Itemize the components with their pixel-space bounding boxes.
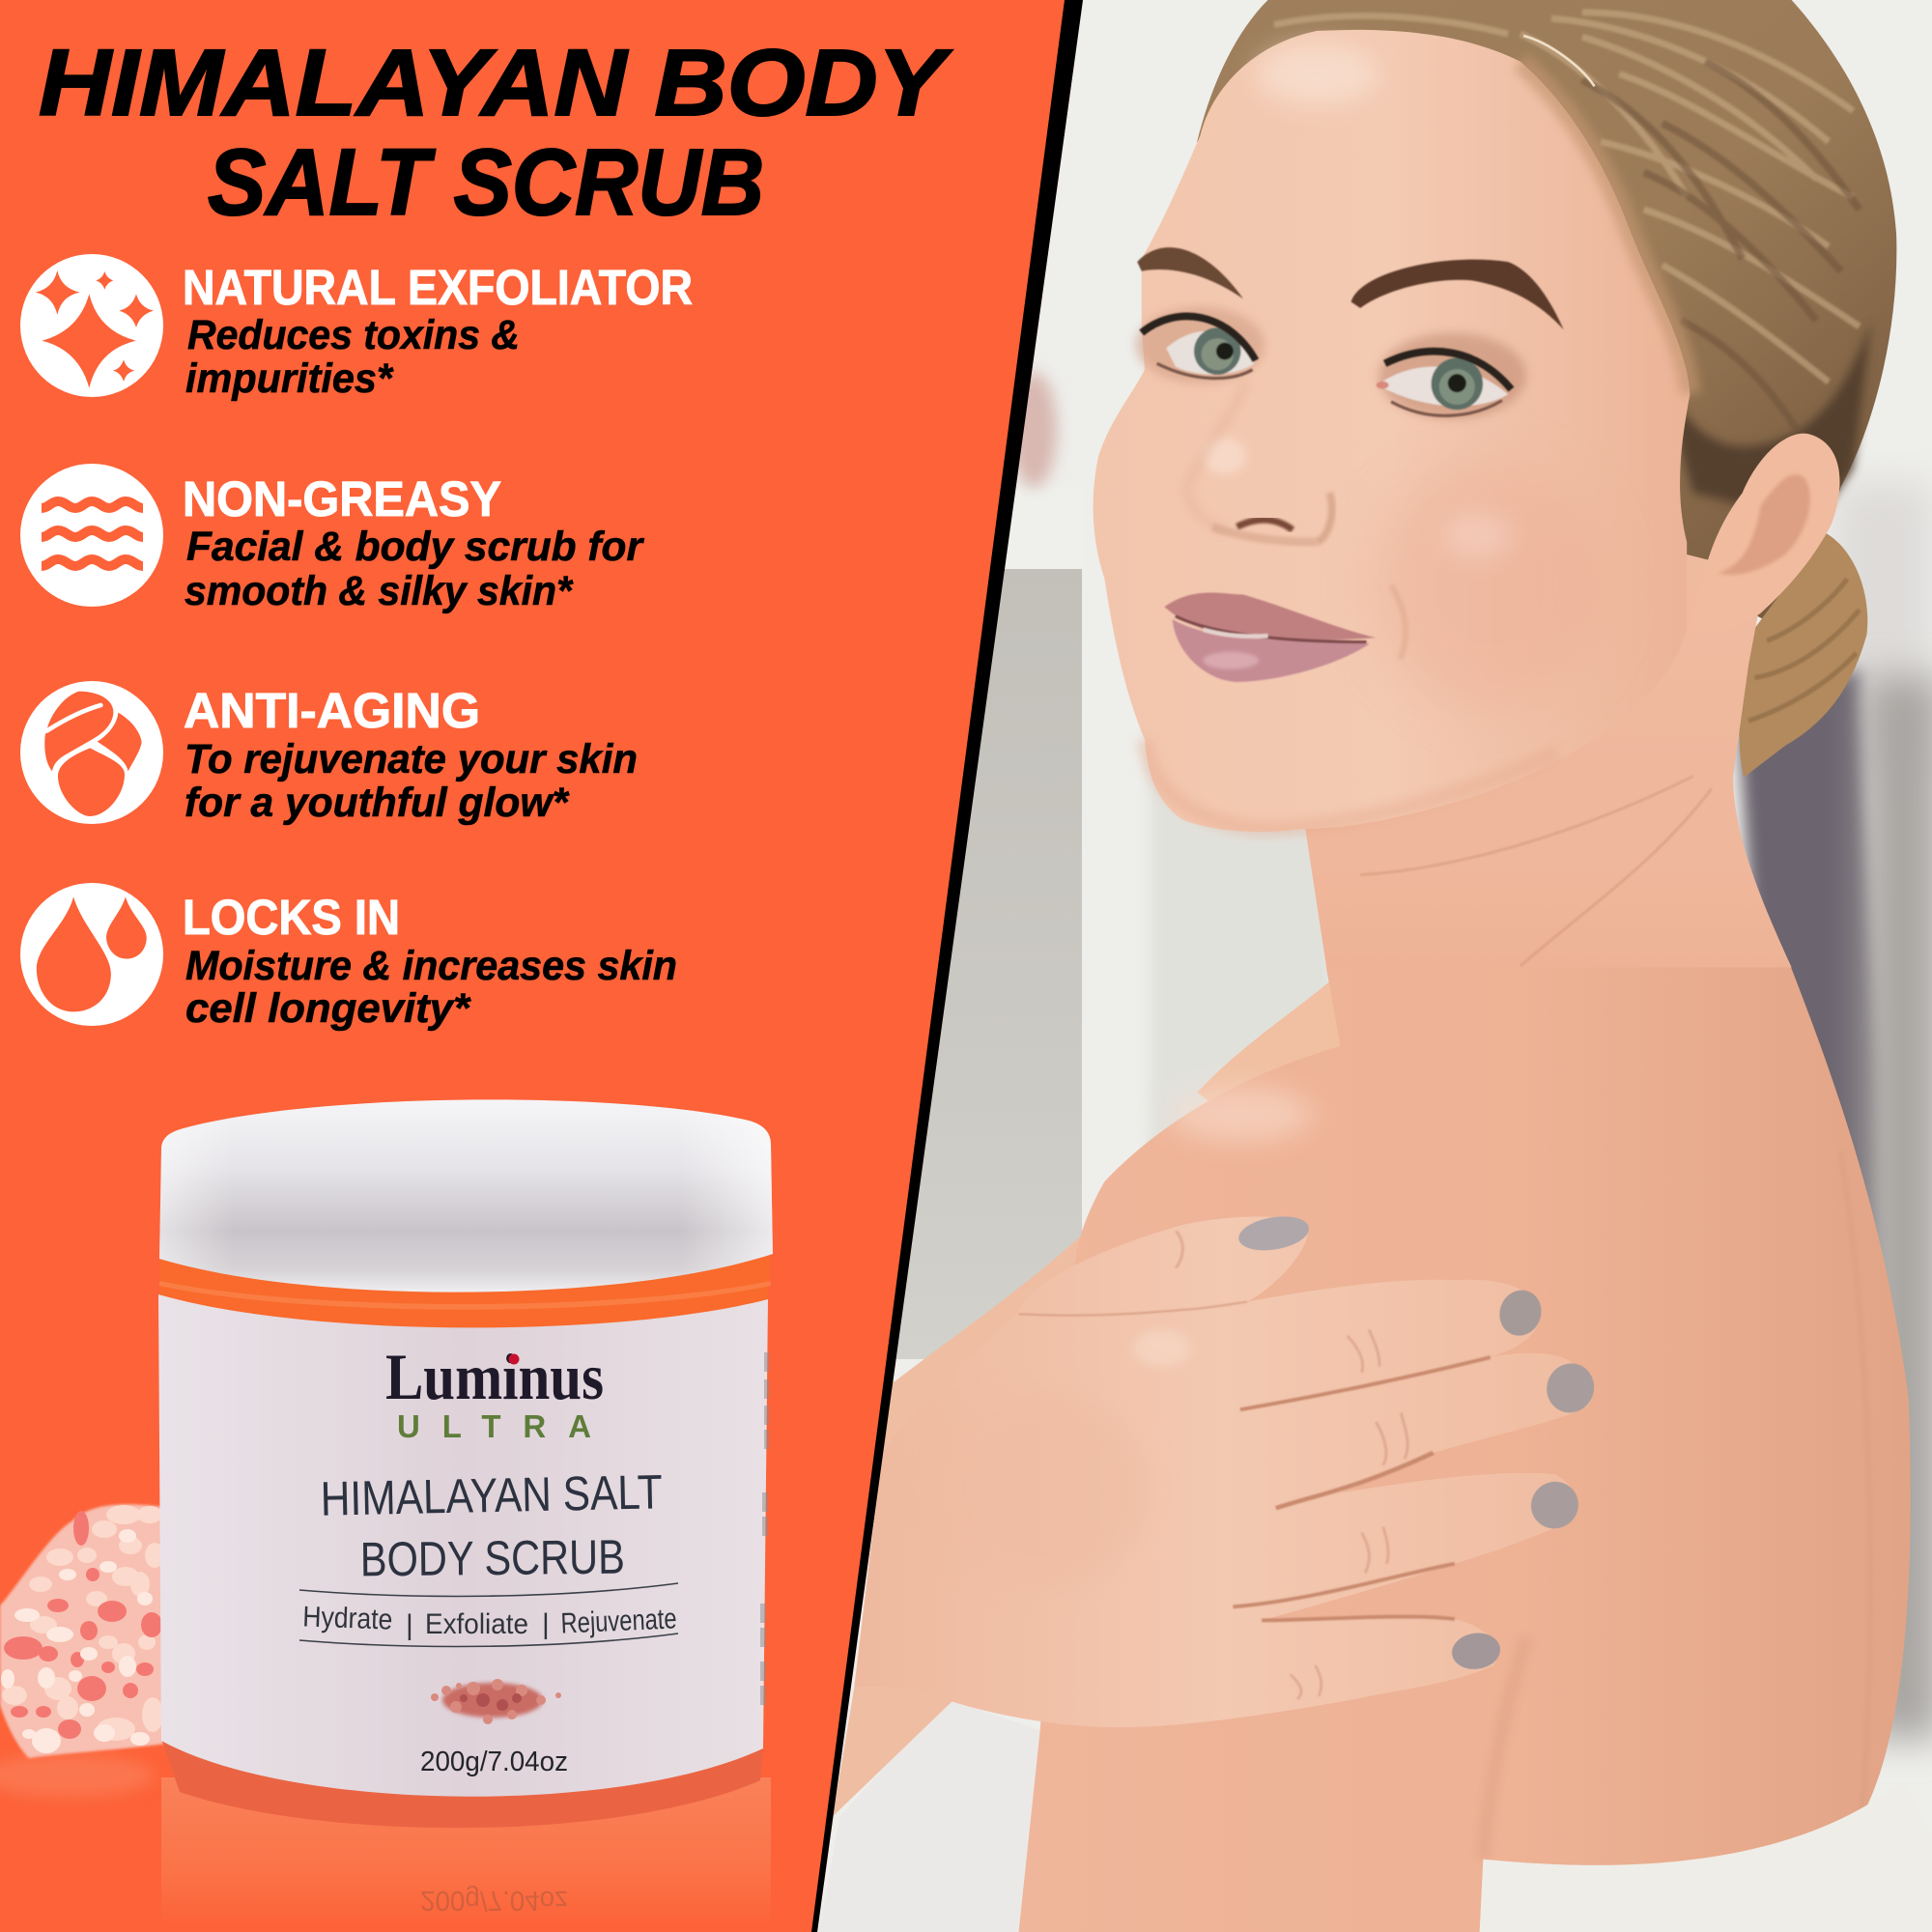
- back, shoulder and arm: [1019, 966, 1932, 1932]
- product name: BODY SCRUB: [360, 1530, 625, 1586]
- hand: [854, 1211, 1597, 1727]
- ear: [1687, 434, 1840, 633]
- heading: NON-GREASY: [183, 471, 501, 526]
- label salt image: [431, 1679, 561, 1724]
- towel back: [1480, 1804, 1868, 1932]
- title: HIMALAYAN BODY: [39, 30, 952, 135]
- label side text: [760, 1352, 769, 1705]
- tagline: |: [406, 1609, 413, 1641]
- description: [185, 524, 644, 614]
- brand logo: ULTRA: [397, 1408, 591, 1444]
- description: smooth & silky skin*: [185, 568, 574, 614]
- tagline: Rejuvenate: [560, 1603, 677, 1640]
- weight: 200g/7.04oz: [420, 1747, 568, 1777]
- towel left: [818, 1699, 1040, 1932]
- heading: NATURAL EXFOLIATOR: [183, 260, 693, 315]
- lid: [159, 1099, 773, 1293]
- product name: [320, 1464, 663, 1586]
- hair dark shade: [1681, 327, 1874, 507]
- icon: water drops: [20, 883, 163, 1026]
- smile line: [1391, 585, 1406, 659]
- hair bun: [1739, 533, 1867, 778]
- jar rim highlight: [159, 1281, 771, 1310]
- icon: sparkles: [20, 254, 163, 397]
- eye sockets: [1135, 307, 1264, 384]
- heading: ANTI-AGING: [184, 683, 480, 738]
- jar rim: [159, 1256, 771, 1327]
- description: Moisture & increases skin: [185, 943, 677, 989]
- description: [185, 312, 520, 402]
- towel and far arm: [833, 981, 1341, 1816]
- left eyebrow: [1137, 247, 1243, 298]
- benefit: natural exfoliator: [20, 254, 693, 402]
- icon: head towel: [20, 681, 163, 824]
- tagline: Hydrate: [302, 1601, 393, 1636]
- head and hair: [1094, 0, 1896, 967]
- left eye: [1142, 316, 1256, 379]
- title: SALT SCRUB: [208, 129, 764, 235]
- panel: orange background: [0, 0, 1065, 1932]
- label: [158, 1294, 768, 1797]
- tagline: [299, 1583, 678, 1646]
- description: Reduces toxins &: [187, 312, 520, 358]
- brand logo: [385, 1340, 604, 1444]
- photo background: bathroom shelves: [811, 0, 1932, 1932]
- forehead highlight: [1256, 43, 1378, 104]
- nails: [1235, 1211, 1597, 1674]
- description: [185, 943, 677, 1032]
- far shoulder: [1198, 981, 1341, 1101]
- product jar: [158, 1099, 773, 1828]
- mirrored weight text: 200g/7.04oz: [420, 1885, 568, 1916]
- salt pile: [0, 1504, 166, 1797]
- right eye: [1377, 352, 1511, 415]
- hair: [1197, 0, 1896, 635]
- icon: waves: [20, 464, 163, 607]
- divider: black diagonal stripe: [811, 0, 1083, 1932]
- cheek blush: [1381, 484, 1540, 688]
- product name: HIMALAYAN SALT: [320, 1464, 663, 1526]
- description: impurities*: [185, 355, 394, 402]
- description: for a youthful glow*: [185, 780, 570, 826]
- heading: LOCKS IN: [183, 890, 400, 945]
- hair strands: [1274, 13, 1860, 382]
- nose: [1186, 382, 1332, 542]
- tagline: |: [542, 1608, 550, 1640]
- benefit: locks in: [20, 883, 677, 1032]
- lips: [1164, 592, 1376, 682]
- hairline shadow: [1520, 62, 1690, 394]
- right eyebrow: [1351, 260, 1564, 329]
- far arm: [833, 1237, 1097, 1816]
- description: Facial & body scrub for: [186, 524, 644, 570]
- description: To rejuvenate your skin: [185, 736, 638, 782]
- finger gaps: [1019, 1302, 1491, 1620]
- benefit: anti-aging: [20, 681, 638, 826]
- description: [185, 736, 638, 826]
- photo: woman applying scrub: [811, 0, 1932, 1932]
- benefit: non-greasy: [20, 464, 644, 614]
- brand logo: Luminus: [385, 1340, 604, 1413]
- neck: [1305, 554, 1792, 967]
- title: [39, 30, 952, 235]
- knuckle creases: [1176, 1231, 1407, 1699]
- description: cell longevity*: [185, 985, 471, 1032]
- jaw shadow: [1145, 739, 1557, 829]
- tagline: Exfoliate: [425, 1608, 528, 1640]
- jar lower base: [161, 1739, 763, 1828]
- reflection under jar: [161, 1777, 771, 1927]
- face: [1094, 30, 1690, 832]
